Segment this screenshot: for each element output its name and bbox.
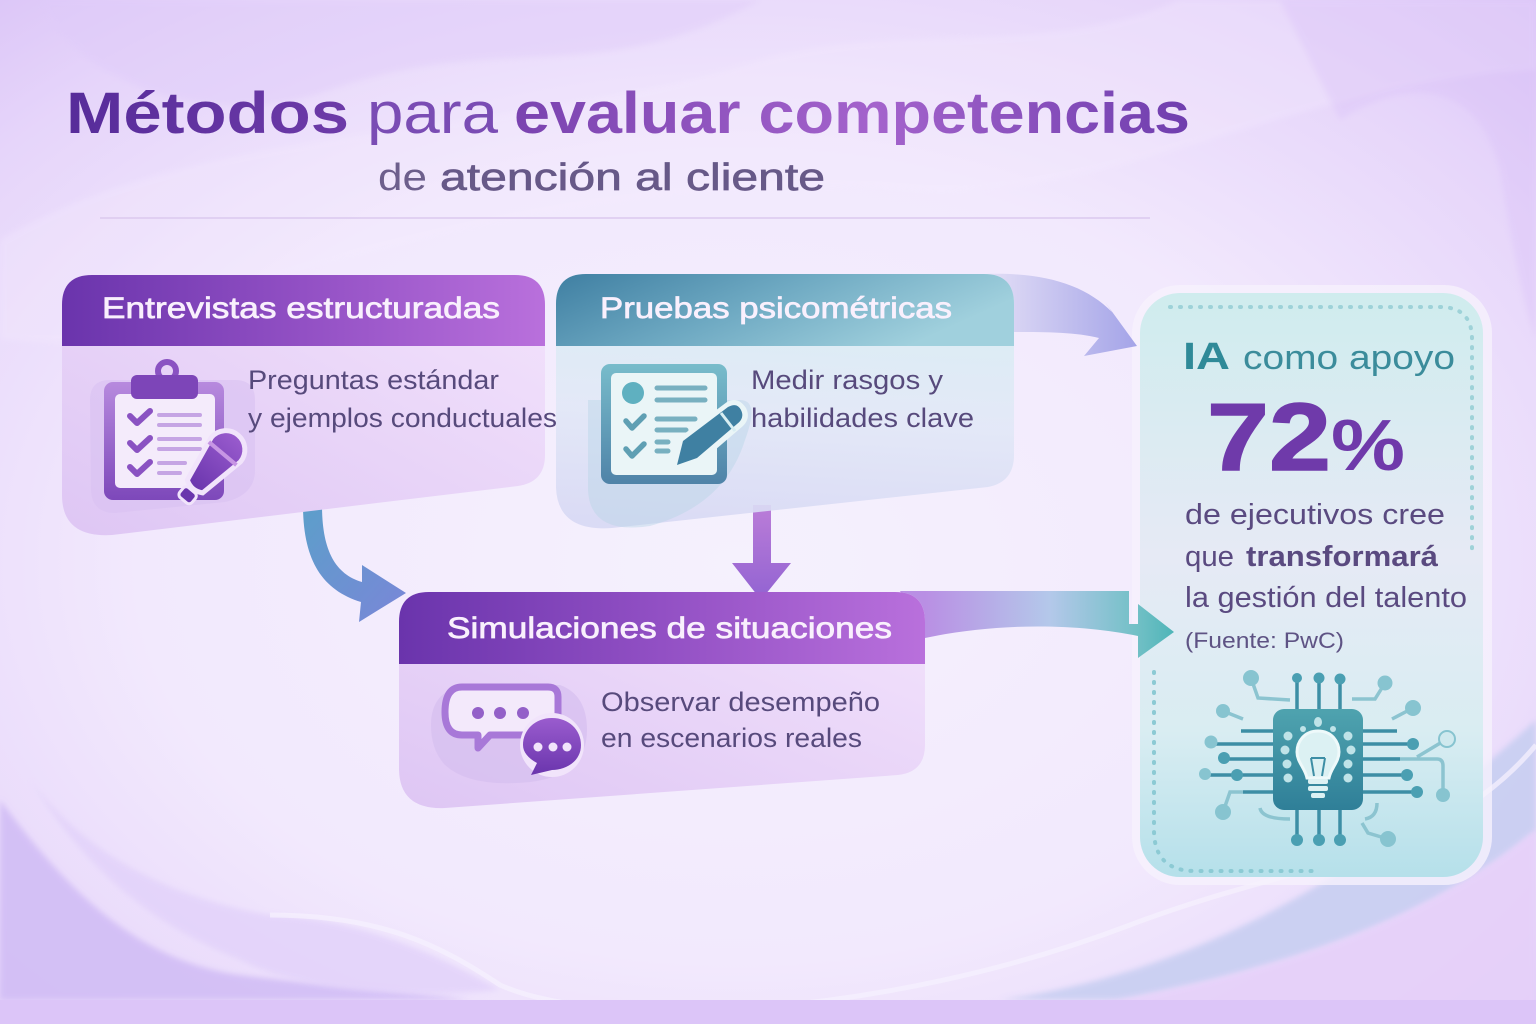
arrow: pruebas to IA panel <box>985 274 1137 356</box>
subtitle: atención al cliente <box>440 157 825 199</box>
text: preguntas: Preguntas estándar <box>248 365 499 395</box>
arrow: entrevistas to simulaciones <box>303 505 406 622</box>
icon: test sheet and pencil <box>588 364 751 528</box>
text: de ejecutivos: de ejecutivos cree <box>1185 499 1445 531</box>
panel: simulaciones de situaciones <box>399 592 925 808</box>
heading: IA como apoyo: como apoyo <box>1243 339 1455 377</box>
icon: AI chip with light bulb <box>1199 670 1455 847</box>
icon: chat bubbles <box>431 685 587 783</box>
text: preguntas: y ejemplos conductuales <box>248 403 557 433</box>
text: de ejecutivos: que <box>1185 541 1234 573</box>
stat: 72% <box>1207 384 1405 491</box>
title: Métodos <box>66 81 349 146</box>
text: medir: Medir rasgos y <box>751 365 944 395</box>
header: pruebas <box>556 274 1014 346</box>
header: pruebas: Pruebas psicométricas <box>600 292 952 325</box>
text: medir <box>751 365 974 433</box>
header: simulaciones <box>399 592 925 664</box>
arrow: simulaciones to IA panel <box>900 591 1174 658</box>
title: evaluar competencias <box>514 81 1190 146</box>
title: para <box>367 81 499 146</box>
text: de ejecutivos: la gestión del talento <box>1185 582 1467 614</box>
arrow: pruebas to simulaciones <box>732 505 791 600</box>
header: entrevistas: Entrevistas estructuradas <box>102 292 500 325</box>
text: observar: Observar desempeño <box>601 687 880 717</box>
header: entrevistas <box>62 275 545 346</box>
panel: pruebas psicométricas <box>556 274 1014 528</box>
panel: entrevistas estructuradas <box>62 275 557 535</box>
text: de ejecutivos: transformará <box>1246 541 1439 573</box>
text: observar <box>601 687 880 753</box>
stat: 72%: % <box>1331 406 1405 486</box>
subtitle <box>378 157 825 199</box>
subtitle: de <box>378 157 427 199</box>
panel: IA como apoyo <box>1132 285 1492 885</box>
source note: (Fuente: PwC) <box>1185 628 1344 653</box>
text: medir: habilidades clave <box>751 403 974 433</box>
text: preguntas <box>248 365 557 433</box>
heading: IA como apoyo: IA <box>1183 336 1230 378</box>
title <box>66 81 1190 146</box>
header: simulaciones: Simulaciones de situaciones <box>447 612 892 645</box>
text: observar: en escenarios reales <box>601 723 862 753</box>
icon: clipboard and microphone <box>90 362 255 513</box>
heading: IA como apoyo <box>1183 336 1455 378</box>
stat: 72%: 72 <box>1207 384 1331 491</box>
text: de ejecutivos <box>1185 499 1467 614</box>
